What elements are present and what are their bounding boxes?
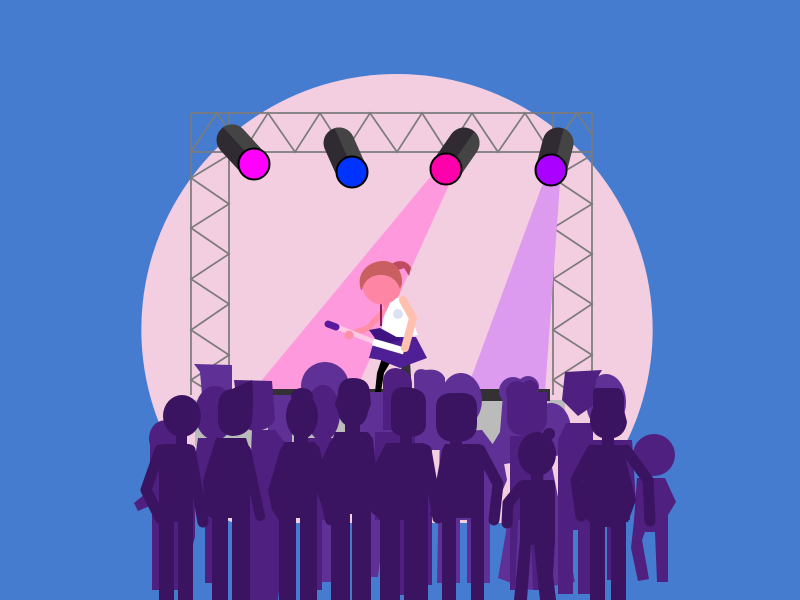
stage deck — [195, 389, 565, 446]
front figure 2 — [203, 380, 260, 600]
back figure: behind singer — [360, 392, 395, 577]
spotlight: purple — [536, 124, 577, 186]
hair — [360, 261, 402, 290]
legs — [375, 358, 412, 392]
mid figure 8 — [558, 370, 602, 594]
chest detail — [393, 309, 403, 319]
mid figure 7 — [506, 380, 547, 590]
bun — [390, 261, 412, 276]
guitar neck — [337, 327, 377, 343]
guitar headstock — [328, 324, 336, 327]
purple light beam — [466, 183, 560, 392]
mid figure 2 — [193, 386, 235, 583]
far arm — [349, 312, 383, 335]
back figure: right head — [531, 403, 571, 457]
back figure: afro — [301, 362, 349, 410]
front figure 1 — [146, 395, 203, 600]
spotlight: blue — [319, 123, 368, 188]
spotlight: pink — [430, 121, 486, 184]
back figure: hat — [194, 364, 232, 395]
skirt and guitar body — [369, 337, 427, 368]
mid figure 3 — [234, 380, 290, 600]
head — [362, 266, 402, 304]
back figure: far right head — [586, 374, 626, 430]
stage truss — [191, 113, 592, 395]
mid figure 9 — [590, 440, 636, 580]
middle row of crowd — [134, 368, 676, 600]
white forearm — [373, 342, 404, 351]
back figure: centre left — [268, 395, 292, 445]
mid figure 4 — [306, 385, 340, 590]
guitar shoulder — [369, 328, 402, 345]
performer — [328, 261, 427, 392]
front figure 3 — [268, 388, 330, 600]
front row of crowd — [146, 378, 650, 600]
front figure 7 — [507, 428, 556, 600]
near arm — [403, 300, 413, 348]
front figure 6 — [430, 393, 498, 600]
spotlight: magenta — [210, 118, 270, 180]
back row of crowd — [194, 362, 626, 590]
mid figure 5 — [375, 368, 415, 595]
back figure: curly — [414, 369, 445, 450]
back figure: dress — [478, 376, 575, 590]
front figure 4 — [318, 378, 376, 600]
mid figure 6 — [418, 450, 432, 585]
strap — [380, 302, 382, 326]
front figure 8 — [576, 388, 650, 600]
front figure 5 — [370, 387, 438, 600]
torso — [380, 298, 418, 340]
back figure: legs — [318, 440, 335, 582]
back figure: large head — [437, 373, 507, 583]
hand — [344, 330, 354, 340]
mid figure right — [631, 434, 676, 582]
pink light beam — [252, 176, 449, 392]
neck — [380, 298, 392, 312]
mid figure left — [134, 420, 195, 590]
pink spotlight circle — [141, 74, 653, 523]
